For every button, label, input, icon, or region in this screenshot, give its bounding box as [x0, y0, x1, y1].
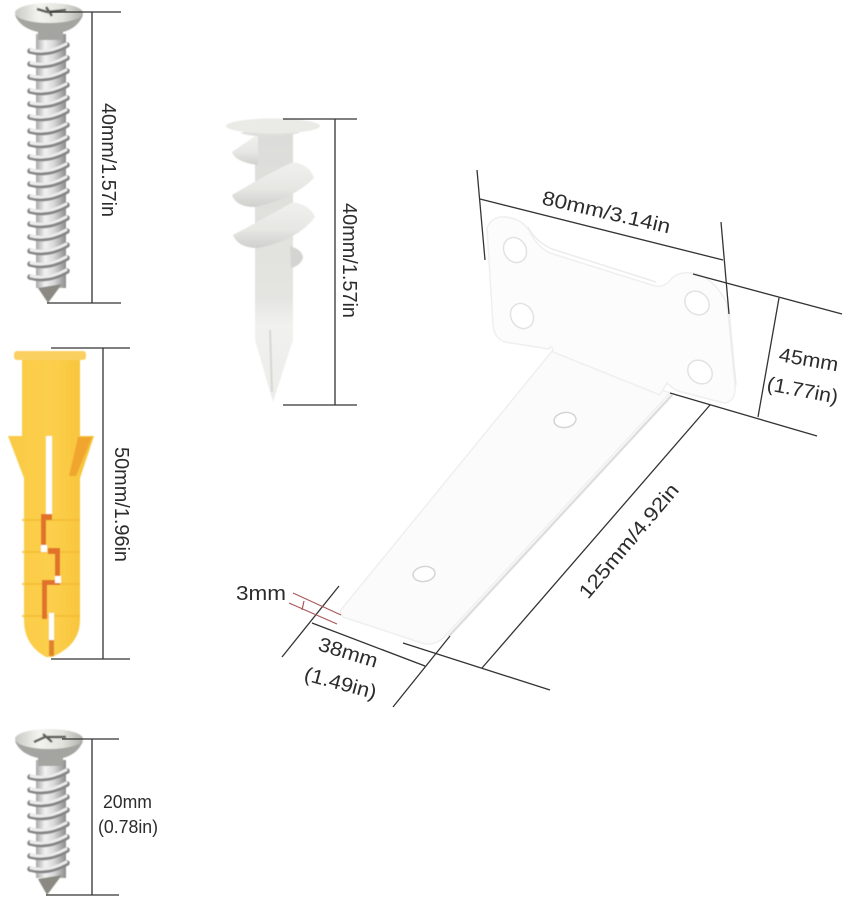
anchor image — [226, 118, 320, 402]
bracket arm — [340, 350, 670, 644]
short screw — [15, 729, 158, 895]
dimension lines — [51, 348, 130, 659]
label: 3mm: 3mm — [236, 583, 286, 605]
label: (1.77in): (1.77in) — [765, 373, 840, 409]
plate edge thickness — [528, 227, 736, 385]
label: 40mm/1.57in: 40mm/1.57in — [97, 103, 119, 217]
80mm dimension — [477, 170, 729, 314]
arm mounting holes — [412, 411, 577, 583]
plug image — [8, 351, 94, 657]
125mm dimension — [403, 405, 710, 690]
dimension lines — [282, 586, 450, 707]
dimension lines — [477, 170, 729, 314]
label: 40mm/1.57in: 40mm/1.57in — [338, 203, 360, 318]
label: 125mm/4.92in: 125mm/4.92in — [575, 480, 684, 603]
label: (0.78in): (0.78in) — [98, 817, 158, 837]
dimension lines — [283, 119, 357, 405]
plate mounting holes — [499, 233, 717, 389]
45mm dimension — [670, 274, 842, 436]
dimension lines — [47, 12, 121, 303]
bracket plate — [487, 217, 735, 403]
dimension lines — [403, 405, 710, 690]
label: 80mm/3.14in: 80mm/3.14in — [540, 187, 672, 238]
screw image: 40mm — [15, 3, 83, 303]
label: 45mm: 45mm — [777, 344, 840, 376]
label: (1.49in): (1.49in) — [302, 664, 379, 704]
dimension lines — [670, 274, 842, 436]
nylon drywall anchor — [226, 118, 360, 405]
long screw — [15, 3, 121, 303]
L bracket — [340, 217, 736, 644]
3mm dimension — [236, 583, 341, 624]
arm side edge — [449, 395, 672, 636]
dimension lines — [46, 739, 119, 895]
thickness lines — [289, 593, 341, 624]
yellow wall plug — [8, 348, 132, 659]
label: 50mm/1.96in: 50mm/1.96in — [110, 447, 132, 562]
label: 38mm: 38mm — [316, 634, 380, 673]
38mm dimension — [282, 586, 450, 707]
label: 20mm: 20mm — [103, 792, 152, 812]
screw image: 20mm — [15, 729, 83, 895]
